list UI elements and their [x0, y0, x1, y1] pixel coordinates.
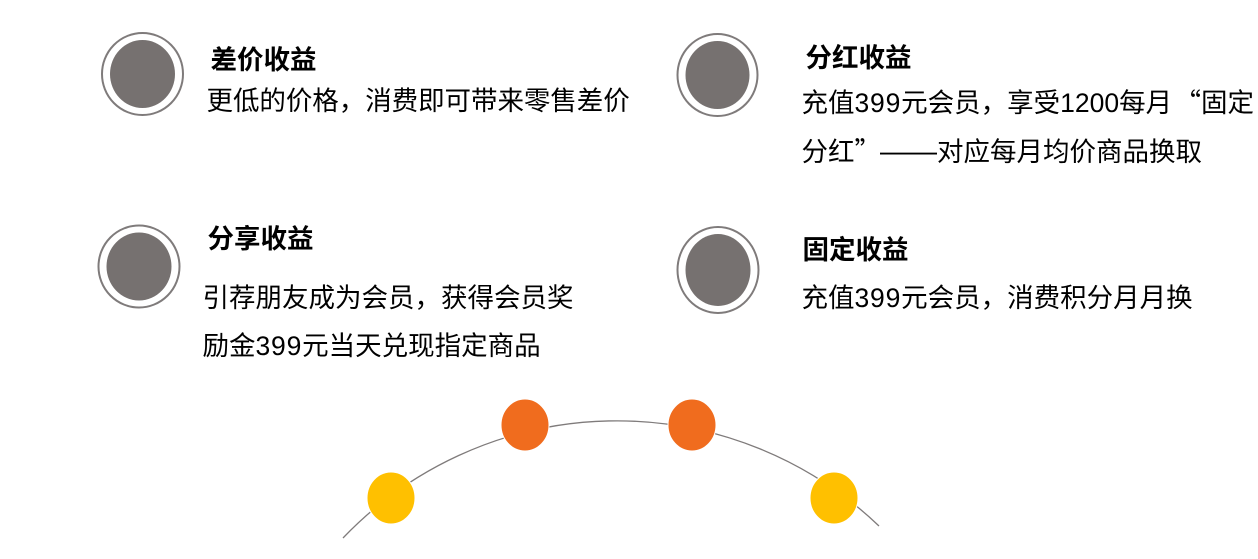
- text: 分红收益 description: 分红”——对应每月均价商品换取: [802, 130, 1202, 169]
- text: 分红收益 description: 充值399元会员，享受1200每月 “固定: [802, 81, 1254, 120]
- text: 分享收益 description: 励金399元当天兑现指定商品: [202, 331, 541, 361]
- text: 固定收益 description: 充值399元会员，消费积分月月换: [802, 283, 1193, 313]
- heading: 固定收益: 固定收益: [802, 235, 908, 265]
- heading: 分红收益: 分红收益: [806, 43, 912, 73]
- heading: 差价收益: 差价收益: [210, 45, 316, 75]
- text: 差价收益 description: 更低的价格，消费即可带来零售差价: [206, 86, 630, 116]
- text: 分红收益 description: [802, 81, 1254, 169]
- heading: 分享收益: 分享收益: [208, 224, 314, 254]
- text: 分享收益 description: 引荐朋友成为会员，获得会员奖: [202, 283, 574, 313]
- text: 分享收益 description: [202, 283, 574, 361]
